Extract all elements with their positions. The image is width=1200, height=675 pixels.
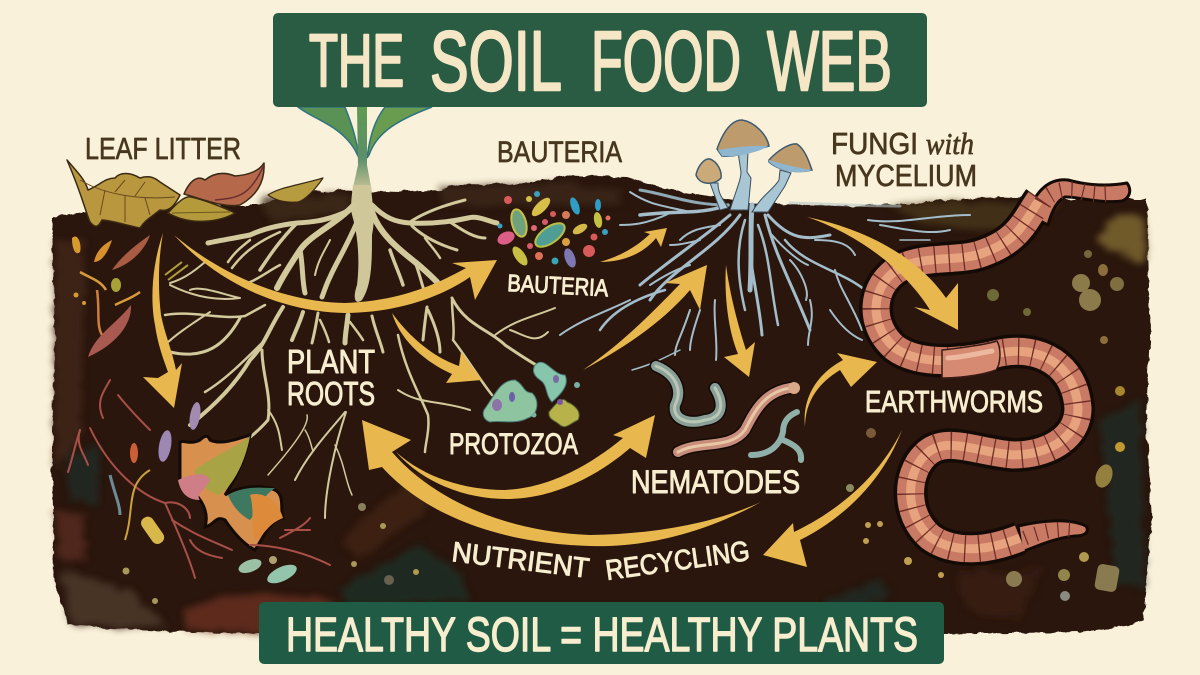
title text: WEB [767,14,892,108]
icon: protozoa [483,362,580,427]
icon: plant stem and leaves [298,107,432,192]
arrow: nematodes to earthworms [805,353,877,427]
bottom banner [259,602,944,664]
arrow: roots to nematodes [396,415,655,499]
arrow: earthworms to nutrient recycling [763,430,902,567]
arrow: leaf litter to bacteria [174,235,497,313]
icon: litter fragments [72,235,188,357]
label: plant roots [287,343,375,412]
title text: SOIL [430,14,562,108]
arrow: bacteria to fungi [600,228,667,262]
label: nematodes: NEMATODES [631,464,800,500]
label: fungi with mycelium: FUNGI with [831,126,974,161]
label: leaf litter: LEAF LITTER [85,131,241,166]
label: fungi with mycelium [831,126,977,193]
icon: earthworm [876,180,1130,552]
label: plant roots: PLANT [287,343,375,380]
title banner [273,13,927,108]
soil colour patches [55,182,1146,632]
label: nutrient recycling: RECYCLING [604,535,751,586]
label: earthworms: EARTHWORMS [865,384,1043,419]
icon: mushrooms [696,120,812,212]
plant roots [165,185,555,518]
arrow: leaf litter to decomposers [143,233,182,408]
arrow: roots to protozoa [392,313,482,383]
icon: bacteria cluster [495,191,610,269]
icon: nematodes [656,366,801,460]
arrow: fungi to earthworms [807,217,958,330]
panel: soil cross-section [52,175,1152,634]
label: fungi with mycelium: MYCELIUM [835,158,977,193]
label: nutrient recycling [450,535,751,586]
pebbles [122,250,1125,604]
title text: THE [309,19,404,102]
label: bacteria in soil: BAUTERIA [507,270,609,302]
title text: FOOD [591,14,741,108]
banner text: HEALTHY SOIL = HEALTHY PLANTS [286,609,918,662]
label: plant roots: ROOTS [287,375,375,412]
arrow: nutrient recycling to roots [362,420,761,546]
mycelium threads [560,190,970,370]
icon: leaf litter on the surface [67,160,323,228]
icon: decomposing leaf and twigs [68,380,330,587]
label: protozoa: PROTOZOA [449,428,578,461]
arrow: fungi to nematodes [724,265,755,377]
arrow: protozoa to fungi [583,265,707,370]
label: bacteria above ground: BAUTERIA [497,136,622,169]
label: nutrient recycling: NUTRIENT [450,536,591,584]
